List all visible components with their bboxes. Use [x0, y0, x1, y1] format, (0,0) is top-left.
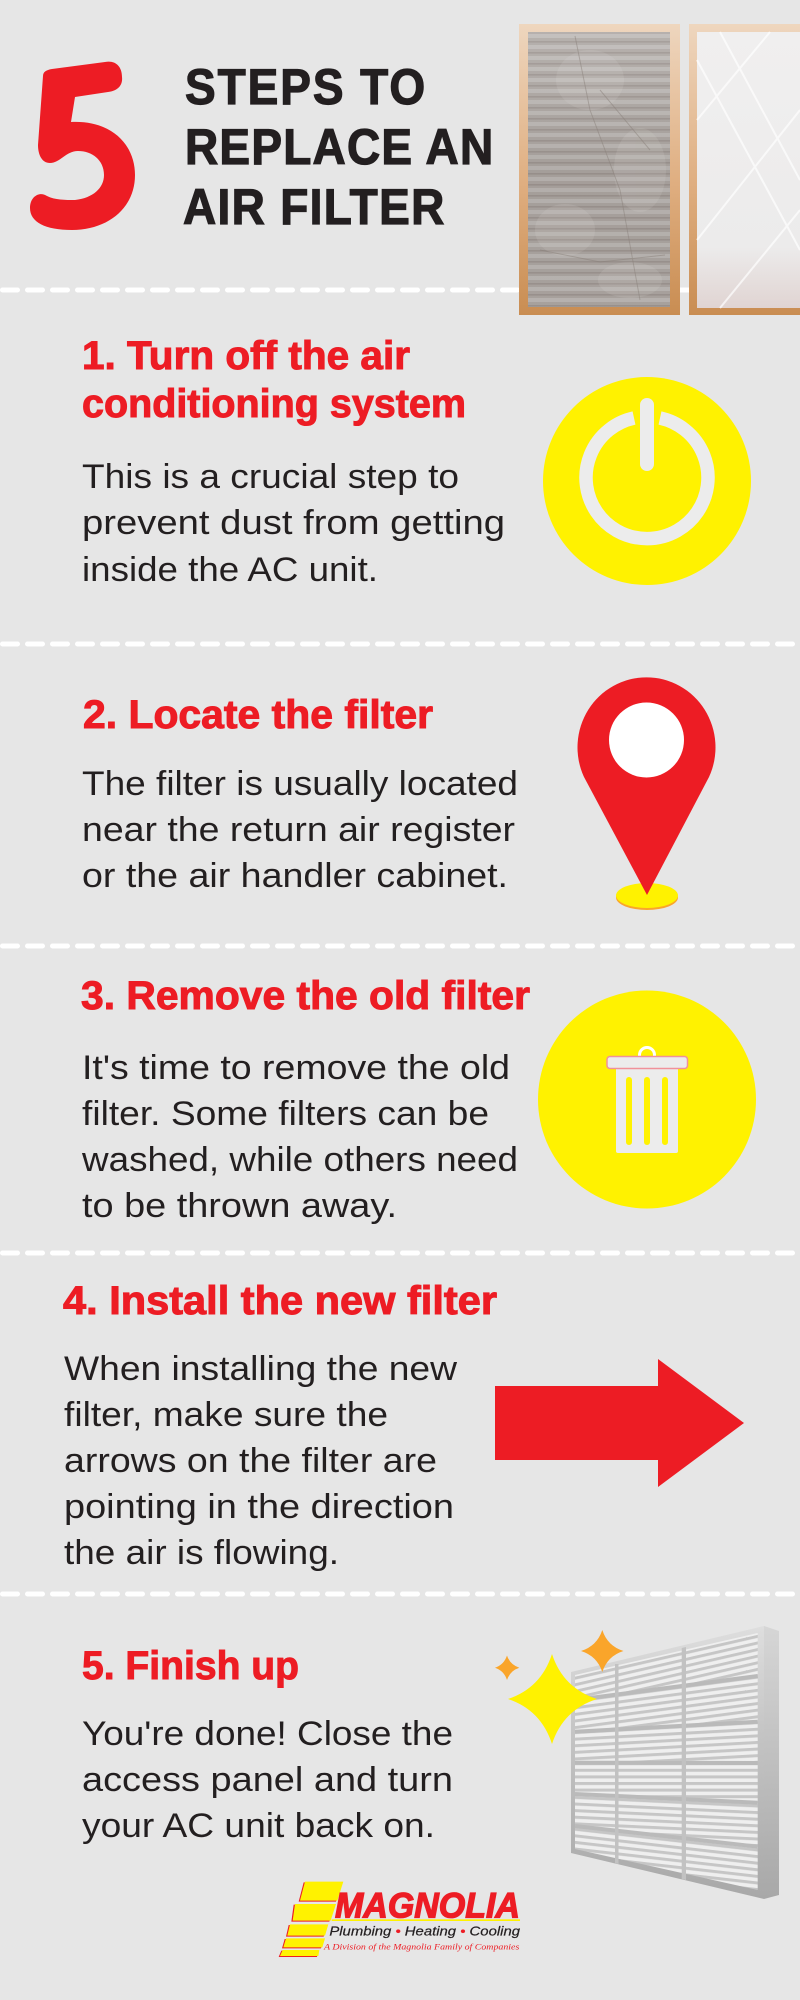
title [183, 60, 493, 235]
photo: clean air filter [689, 24, 800, 315]
step 3 text: washed, while others need [81, 1141, 518, 1179]
step 5 text: access panel and turn [82, 1761, 453, 1799]
step 1 heading: 1. Turn off the air [82, 334, 410, 378]
step 1 heading [82, 334, 466, 426]
step 5 heading: 5. Finish up [82, 1644, 299, 1688]
step 2 text: The filter is usually located [82, 765, 518, 803]
icon: new air filter [571, 1626, 779, 1899]
logo: Magnolia: Plumbing • Heating • Cooling [329, 1925, 520, 1939]
step 4 text: pointing in the direction [64, 1488, 454, 1526]
title: REPLACE AN [185, 120, 493, 175]
logo: Magnolia: MAGNOLIA [335, 1887, 520, 1926]
icon: large yellow sparkle [508, 1654, 597, 1744]
icon: small orange sparkle [495, 1656, 519, 1680]
icon: power button [543, 377, 751, 585]
step 4 text: the air is flowing. [64, 1534, 339, 1572]
title: AIR FILTER [183, 180, 444, 235]
step 1 text: prevent dust from getting [82, 504, 505, 542]
step 2 text [82, 765, 518, 895]
step 3 text: to be thrown away. [82, 1187, 397, 1225]
arrow [495, 1359, 744, 1487]
step 3 text: It's time to remove the old [82, 1049, 510, 1087]
step 5 text [82, 1715, 453, 1845]
step 1 text: inside the AC unit. [82, 551, 378, 589]
step 2 heading: 2. Locate the filter [83, 693, 433, 737]
photo: dirty air filter [519, 24, 680, 315]
step 3 heading: 3. Remove the old filter [81, 974, 530, 1018]
icon: location pin [578, 677, 716, 910]
step 4 text: When installing the new [64, 1350, 457, 1388]
step 5 text: You're done! Close the [82, 1715, 453, 1753]
step 1 text [82, 458, 505, 589]
step 4 text: filter, make sure the [64, 1396, 388, 1434]
step 2 text: near the return air register [82, 811, 515, 849]
icon: orange sparkle [581, 1630, 624, 1672]
step 4 heading: 4. Install the new filter [63, 1279, 497, 1323]
logo: Magnolia [279, 1882, 520, 1957]
icon: trash can [538, 990, 756, 1208]
big number 5 [30, 62, 135, 230]
step 1 heading: conditioning system [82, 382, 466, 426]
title: STEPS TO [185, 60, 425, 115]
step 4 text [64, 1350, 457, 1572]
step 1 text: This is a crucial step to [82, 458, 459, 496]
step 2 text: or the air handler cabinet. [82, 857, 508, 895]
step 4 text: arrows on the filter are [64, 1442, 437, 1480]
step 3 text: filter. Some filters can be [82, 1095, 489, 1133]
step 5 text: your AC unit back on. [82, 1807, 435, 1845]
step 3 text [81, 1049, 518, 1225]
logo: Magnolia: A Division of the Magnolia Family of Companies [323, 1942, 519, 1951]
